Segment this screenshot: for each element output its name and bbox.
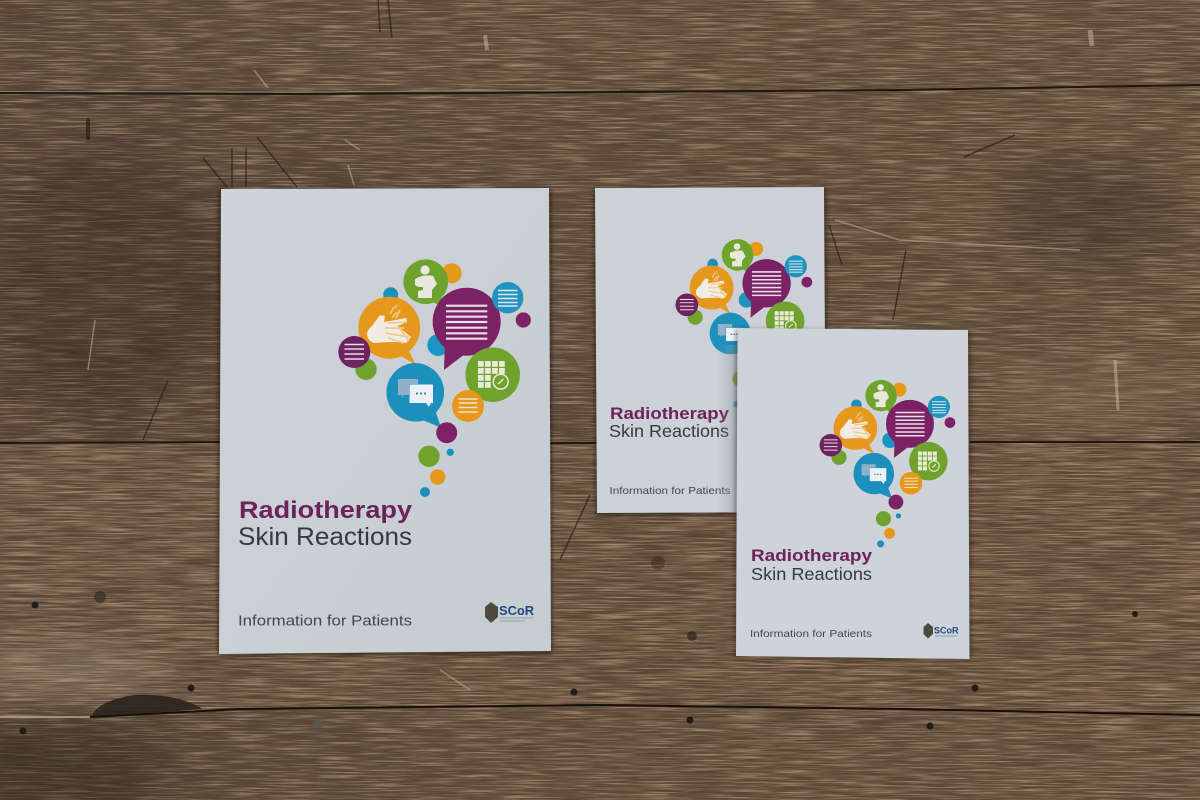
small orange circle behind person: [442, 263, 462, 283]
footer text: Information for Patients: [750, 628, 872, 640]
icon: back chat: [398, 379, 418, 398]
nails and knots: [20, 556, 1138, 734]
speech bubble: conversation: [386, 363, 444, 428]
title: Radiotherapy: [751, 546, 873, 565]
logo: SCoR: [485, 602, 534, 623]
bubble cluster: [338, 259, 531, 497]
dark knot patch: [92, 695, 203, 716]
brochure: large A4: [218, 188, 552, 655]
icon: clock: [493, 374, 508, 389]
logo: SCoR: SCoR: [499, 604, 534, 618]
blue circle with lines: [492, 282, 523, 313]
icon: front chat: [410, 384, 433, 407]
green circle left: [355, 359, 377, 380]
footer text: Information for Patients: [610, 485, 730, 497]
blue dot: [383, 287, 398, 302]
logo: SCoR: SCoR: [934, 626, 959, 636]
icon: person: [415, 265, 437, 298]
card shadow: [218, 190, 552, 655]
card shadow: [734, 329, 971, 660]
title: Radiotherapy: [239, 497, 412, 524]
subtitle: Skin Reactions: [609, 421, 729, 441]
card panel: [736, 328, 970, 659]
scratches: [88, 0, 1015, 560]
icon: hands: [367, 305, 411, 343]
brochure: medium A5: [594, 187, 828, 515]
card shadow: [594, 188, 828, 515]
orange circle with lines: [452, 390, 484, 422]
card panel: [219, 188, 551, 654]
logo: SCoR: [924, 623, 959, 638]
speech bubble: purple text: [433, 288, 501, 370]
blue circle behind purple bubble: [427, 334, 449, 356]
plank seams: [0, 85, 1200, 94]
small purple circle right: [516, 312, 531, 328]
subtitle: Skin Reactions: [751, 564, 872, 584]
subtitle: Skin Reactions: [238, 523, 412, 551]
green calendar circle: [465, 347, 520, 402]
bubble cluster copy: [820, 380, 955, 547]
speech bubble: hand washing: [358, 297, 420, 365]
speech bubble: patient: [403, 259, 448, 308]
shadow cast by small card on medium card: [717, 345, 737, 513]
purple circle with lines: [338, 336, 370, 368]
footer text: Information for Patients: [238, 612, 412, 630]
card panel: [595, 187, 826, 513]
title: Radiotherapy: [610, 404, 730, 423]
icon: text lines: [446, 306, 487, 339]
bubble cluster copy: [675, 239, 812, 408]
icon: calendar: [478, 361, 505, 388]
brochure: small A6: [734, 328, 971, 660]
trailing bubbles: [418, 422, 457, 497]
